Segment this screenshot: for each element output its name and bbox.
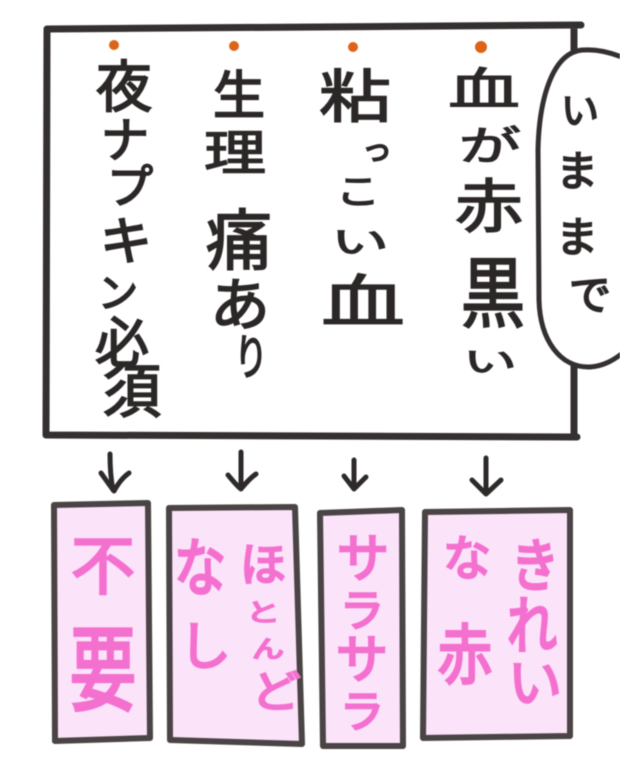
- text: 粘っこい血: 粘: [319, 65, 391, 129]
- panel: サラサラ: [320, 510, 403, 746]
- text: 血が赤黒い: 血: [448, 65, 520, 115]
- panel: きれいな赤: れ: [507, 592, 557, 661]
- speech bubble: いままで: い: [561, 91, 599, 133]
- pin: column 1: [109, 40, 119, 50]
- text: 粘っこい血: い: [331, 224, 389, 260]
- panel: 不要: 不: [71, 531, 135, 603]
- arrow: column 1: [101, 454, 129, 491]
- panel: きれいな赤: [423, 510, 570, 738]
- pin: column 4: [475, 41, 487, 53]
- text: 生理痛あり: 理: [204, 127, 266, 180]
- text: 夜ナプキン必須: キ: [100, 214, 152, 272]
- arrow: column 4: [472, 458, 501, 494]
- speech bubble: いままで: [538, 50, 620, 367]
- speech bubble: いままで: で: [569, 272, 611, 319]
- panel: サラサラ: サ: [336, 632, 388, 690]
- text: 血が赤黒い: [448, 65, 525, 379]
- text: 夜ナプキン必須: プ: [107, 161, 153, 213]
- text: 血が赤黒い: い: [463, 346, 517, 379]
- pin: column 3: [348, 42, 358, 52]
- text: 夜ナプキン必須: [95, 56, 161, 425]
- text: 生理痛あり: [204, 68, 272, 384]
- text: 血が赤黒い: 黒: [461, 251, 525, 337]
- text: 夜ナプキン必須: ン: [98, 272, 138, 316]
- panel: ほとんどなし: な: [174, 535, 226, 604]
- panel: サラサラ: サ: [337, 531, 389, 589]
- arrow: column 3: [344, 460, 366, 489]
- text: 血が赤黒い: が: [459, 125, 521, 169]
- text: 粘っこい血: っ: [362, 134, 392, 167]
- text: 生理痛あり: 痛: [206, 204, 272, 278]
- panel: きれいな赤: 赤: [438, 619, 492, 692]
- panel: ほとんどなし: ほ: [240, 539, 286, 591]
- text: 夜ナプキン必須: ナ: [101, 115, 149, 168]
- panel: ほとんどなし: [169, 507, 302, 744]
- text: 粘っこい血: 血: [321, 271, 405, 335]
- panel: ほとんどなし: し: [179, 619, 231, 677]
- panel: main black frame: [46, 25, 581, 437]
- text: 生理痛あり: 生: [213, 68, 265, 126]
- text: 粘っこい血: こ: [336, 173, 380, 212]
- speech bubble: いままで: ま: [556, 148, 598, 195]
- text: 夜ナプキン必須: 必: [95, 314, 149, 374]
- panel: きれいな赤: な: [443, 533, 491, 586]
- text: 夜ナプキン必須: 須: [103, 360, 161, 425]
- panel: サラサラ: ラ: [340, 688, 384, 737]
- panel: きれいな赤: き: [511, 535, 559, 599]
- speech bubble: いままで: ま: [556, 214, 598, 261]
- panel: きれいな赤: い: [508, 654, 562, 714]
- arrow: column 2: [228, 452, 256, 489]
- text: 血が赤黒い: 赤: [455, 176, 523, 240]
- text: 生理痛あり: あ: [210, 274, 270, 338]
- text: 生理痛あり: り: [234, 330, 268, 384]
- panel: ほとんどなし: と: [246, 600, 280, 627]
- panel: 不要: [54, 503, 150, 741]
- panel: サラサラ: ラ: [340, 587, 384, 636]
- text: 夜ナプキン必須: 夜: [96, 56, 152, 119]
- text: 粘っこい血: [319, 65, 405, 335]
- pin: column 2: [229, 41, 239, 51]
- panel: ほとんどなし: ん: [252, 636, 284, 662]
- panel: ほとんどなし: ど: [251, 667, 301, 716]
- panel: 不要: 要: [70, 620, 136, 724]
